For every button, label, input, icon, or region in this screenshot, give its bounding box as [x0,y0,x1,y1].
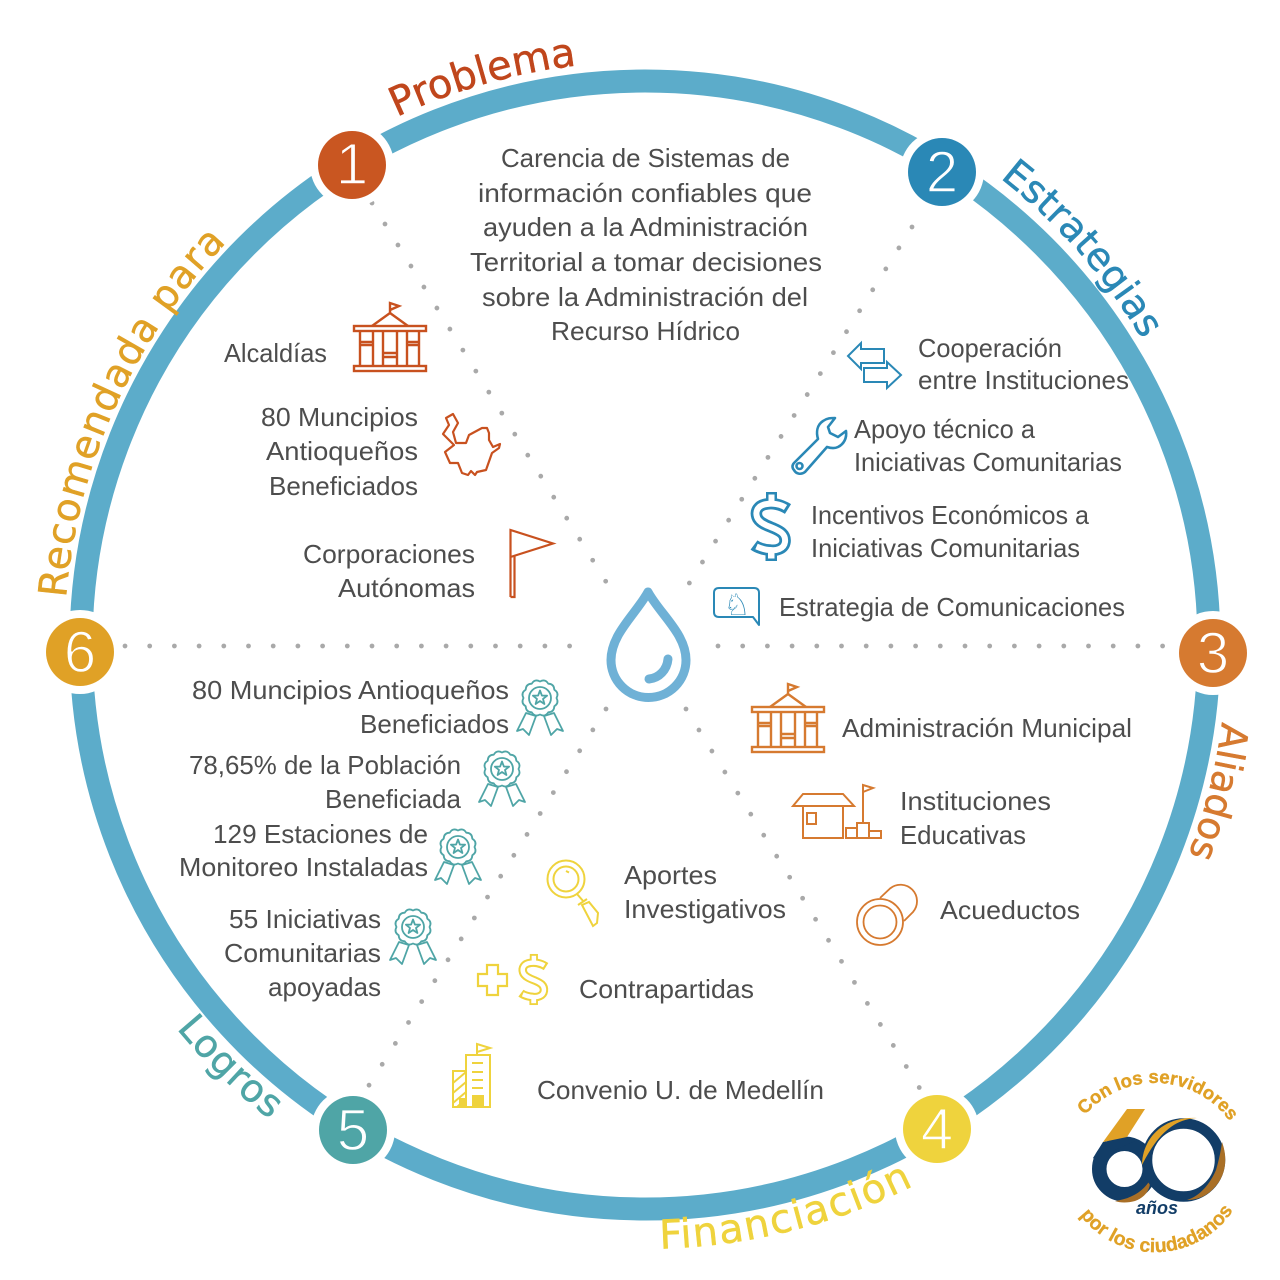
text: Instituciones Educativas: Instituciones [900,786,1051,816]
problem text: información confiables que [478,178,812,208]
badge 6: 6 [64,620,96,685]
text: Estrategia de Comunicaciones: Estrategia de Comunicaciones [779,592,1125,622]
icon: building [453,1044,490,1107]
text: Apoyo técnico: Apoyo técnico a [854,414,1036,444]
logo six [1093,1109,1150,1202]
icon: town hall (orange) [752,684,824,752]
text: Corporaciones Autónomas [303,539,475,603]
text: 129 Estaciones: 129 Estaciones de [213,819,428,849]
badge 3: 3 [1197,621,1229,686]
heading: Recomendada para: Recomendada para [38,233,224,594]
text: Corporaciones Autónomas: Autónomas [338,573,475,603]
text: Administración Municipal: Administración Municipal [842,713,1132,743]
logo arc text top: Con los servidores [1078,1072,1236,1120]
text: 80 Muncipios Antioqueños Beneficiados: Antioqueños [266,436,418,466]
text: 55 Iniciativas: 55 Iniciativas [229,904,381,934]
problem text: ayuden a la Administración [483,212,808,242]
text: 129 Estaciones [179,819,428,882]
icon: wrench [792,418,846,474]
icon: Antioquia map [443,414,500,475]
logo arc text bottom: por los ciudadanos [1078,1206,1232,1252]
badge 4 [895,1087,979,1171]
text: Contrapartidas: Contrapartidas [579,974,754,1004]
badge 4: 4 [921,1097,953,1162]
badge 5 [311,1088,395,1172]
text: Convenio U. de Medellín: Convenio U. de Medellín [537,1075,824,1105]
text: Corporaciones Autónomas: Corporaciones [303,539,475,569]
badge 1 [310,123,394,207]
text: 129 Estaciones: Monitoreo Instaladas [179,852,428,882]
text: Apoyo técnico [854,414,1122,477]
icon: pipe [857,885,917,945]
icon: flag [510,530,553,597]
text: Acueductos: Acueductos [940,895,1080,925]
problem text: Recurso Hídrico [551,316,740,346]
text: 80 Muncipios Antioqueños: 80 Muncipios Antioqueños [192,675,509,705]
text: Cooperación entre Instituciones: Cooperación [918,333,1062,363]
text: 78,65% de la Población Beneficiada [189,750,462,814]
icon: exchange arrows [848,343,901,388]
icon: chess speech bubble [714,588,759,625]
logo: 60 años [1078,1072,1236,1252]
text: 80 Muncipios Antioqueños Beneficiados [261,402,418,501]
icon: award ribbon 3 [435,829,481,884]
logo zero [1142,1118,1225,1200]
text: 80 Muncipios Antioqueños Beneficiados: Beneficiados [269,471,418,501]
text: Cooperación entre Instituciones [918,333,1129,395]
heading: Estrategias: Estrategias [1002,158,1158,336]
text: Instituciones Educativas [900,786,1051,850]
icon: town hall (red) [354,303,426,371]
icon: dollar sign [754,492,788,561]
heading: Aliados: Aliados [1190,722,1248,860]
text: Apoyo técnico: Iniciativas Comunitarias [854,447,1122,477]
logo caption: años: años [1136,1198,1178,1218]
text: 55 Iniciativas: apoyadas [268,972,381,1002]
icon: award ribbon 1 [517,680,563,735]
text: Aportes Investigativos [624,860,786,924]
icon: yellow dollar sign [521,954,546,1005]
text: 80 Muncipios Antioqueños [192,675,509,739]
heading: Financiación: Financiación [662,1169,911,1249]
text: Instituciones Educativas: Educativas [900,820,1026,850]
badge 2: 2 [926,140,958,205]
problem text: Territorial a tomar decisiones [470,247,822,277]
problem text: sobre la Administración del [482,282,808,312]
text: Aportes Investigativos: Aportes [624,860,717,890]
text: Incentivos [811,500,1090,563]
icon: chess speech bubble: ♘ [724,588,750,623]
badge 3 [1171,611,1255,695]
text: 80 Muncipios Antioqueños Beneficiados: 80 Muncipios [261,402,418,432]
text: 55 Iniciativas [224,904,381,1002]
text: 78,65% de la Población Beneficiada: 78,65% de la Población [189,750,461,780]
text: Alcaldías: Alcaldías [224,338,327,368]
problem text: Carencia de Sistemas de [501,143,790,173]
icon: award ribbon 4 [390,909,436,964]
water drop [611,592,686,698]
text: Incentivos: Iniciativas Comunitarias [811,533,1080,563]
heading: Logros: Logros [178,1013,281,1116]
badge 6 [38,610,122,694]
main ring [81,81,1209,1209]
text: Cooperación entre Instituciones: entre Instituciones [918,365,1129,395]
badge 5: 5 [337,1098,369,1163]
text: Incentivos: Incentivos Económicos a [811,500,1090,530]
icon: plus [478,965,507,995]
problem text [470,143,822,346]
icon: award ribbon 2 [479,751,525,806]
badge 1: 1 [336,132,368,197]
badge 2 [900,130,984,214]
text: 55 Iniciativas: Comunitarias [224,938,381,968]
heading: Problema: Problema [388,44,574,116]
text: Aportes Investigativos: Investigativos [624,894,786,924]
icon: magnifier [548,860,598,926]
text: 80 Muncipios Antioqueños: Beneficiados [360,709,509,739]
icon: school [793,785,881,838]
dotted divider lines [125,203,1172,1092]
text: 78,65% de la Población Beneficiada: Beneficiada [325,784,462,814]
